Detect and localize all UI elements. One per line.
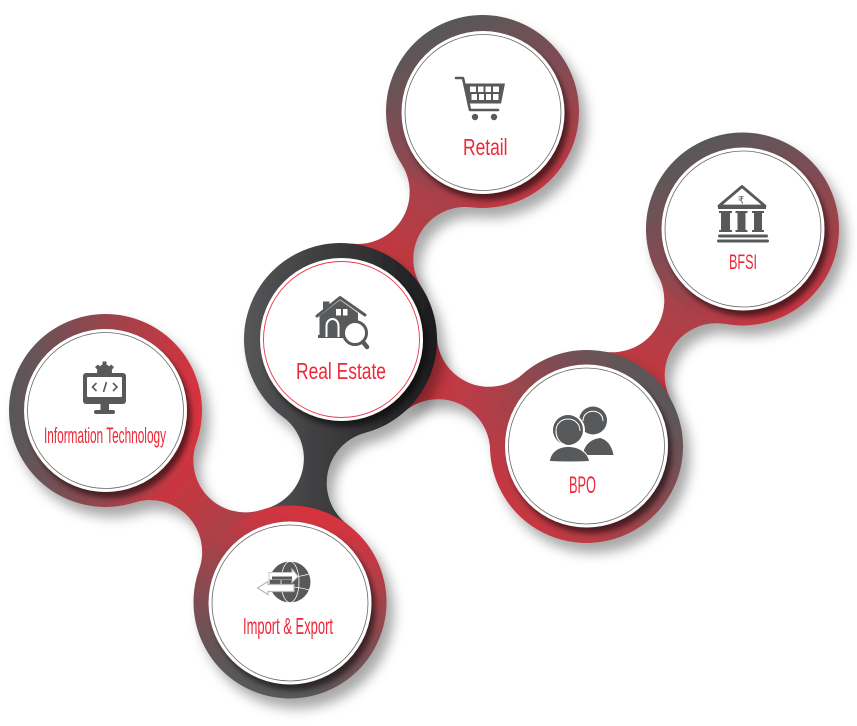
import blob	[194, 506, 386, 698]
BPO blob and connector	[404, 336, 683, 543]
icon: monitor with gear	[83, 362, 126, 414]
real estate blob and neck	[244, 243, 437, 525]
icon: house with magnifier	[317, 298, 367, 347]
icon: globe with arrows	[258, 562, 310, 602]
panel: retail	[352, 15, 579, 287]
panel: information technology	[9, 314, 261, 570]
IT white disc	[24, 329, 187, 492]
label: import and export: Import & Export	[243, 613, 333, 639]
label: real estate: Real Estate	[296, 358, 386, 384]
label: BPO: BPO	[569, 472, 596, 499]
label: information technology: Information Technology	[44, 423, 166, 448]
real estate white disc	[260, 258, 423, 421]
panel: BFSI	[603, 132, 839, 400]
import white disc	[208, 522, 372, 684]
panel: import and export	[194, 506, 386, 698]
panel: real estate	[244, 243, 437, 525]
BPO white disc	[505, 364, 668, 528]
icon: shopping cart	[456, 78, 505, 120]
panel: BPO	[404, 336, 683, 543]
icon: bank: ₹	[738, 196, 744, 206]
BFSI blob and connector	[603, 132, 839, 400]
icon: call centre agents	[548, 406, 614, 463]
BFSI white disc	[662, 148, 824, 310]
retail blob and connector	[352, 15, 579, 287]
retail white disc	[402, 31, 564, 194]
icon: bank	[717, 186, 769, 242]
label: BFSI: BFSI	[729, 251, 757, 274]
IT blob and connector	[9, 314, 261, 570]
label: retail: Retail	[463, 134, 508, 160]
